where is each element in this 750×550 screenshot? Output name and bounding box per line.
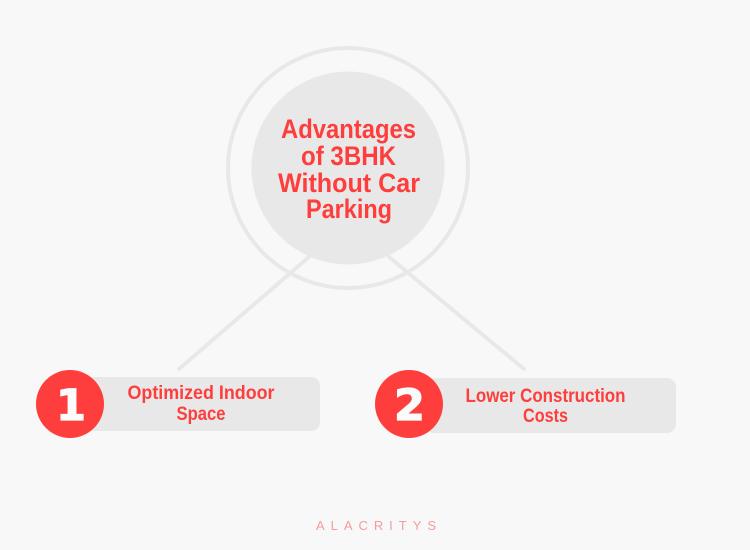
label 1: Optimized Indoor xyxy=(128,383,275,404)
title xyxy=(278,114,420,224)
title: of 3BHK xyxy=(301,141,396,171)
number 1: 1 xyxy=(56,381,86,431)
title: Without Car xyxy=(278,168,420,198)
label 2: Lower Construction xyxy=(466,386,626,407)
label bar 1 xyxy=(85,377,320,431)
central title badge xyxy=(228,48,468,288)
number 2: 2 xyxy=(394,381,425,431)
inner circle xyxy=(252,72,444,264)
connector line: right xyxy=(389,257,524,369)
label 1 xyxy=(128,383,275,425)
item 1 xyxy=(36,370,320,438)
outer ring xyxy=(228,48,468,288)
label 1: Space xyxy=(176,404,226,425)
label 2 xyxy=(466,386,626,427)
title: Parking xyxy=(306,194,392,224)
number badge 2 xyxy=(375,370,443,438)
number badge 1 xyxy=(36,370,104,438)
title: Advantages xyxy=(281,114,416,144)
item 2 xyxy=(375,370,676,438)
connector line: left xyxy=(179,257,309,369)
footer brand: ALACRITYS xyxy=(316,518,436,533)
label 2: Costs xyxy=(523,406,568,427)
label bar 2 xyxy=(425,378,676,433)
